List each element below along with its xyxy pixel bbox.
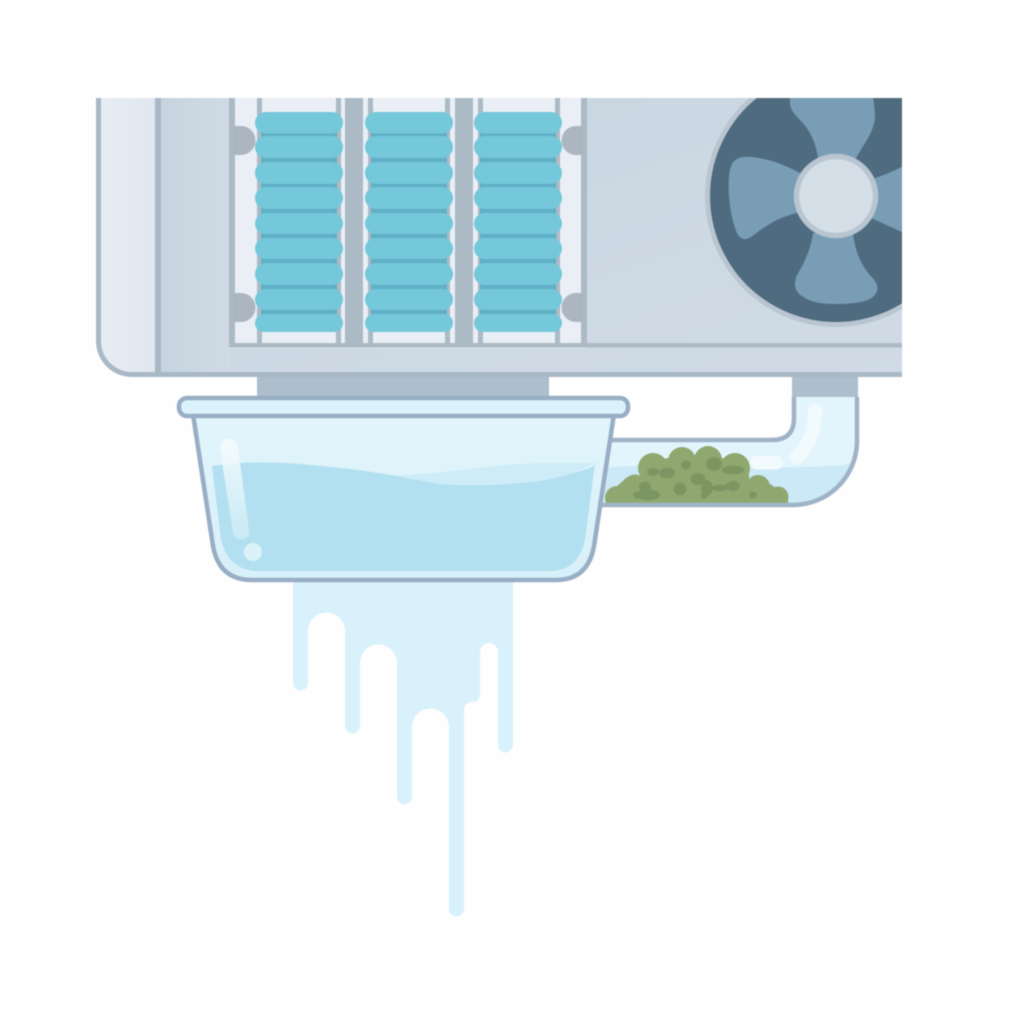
tray water <box>212 462 596 571</box>
coil column dividers <box>257 98 560 343</box>
housing outline <box>98 98 902 374</box>
drain stub under unit <box>257 376 549 399</box>
tray highlights <box>220 439 262 561</box>
pipe connector under unit <box>792 376 858 398</box>
coil fins left <box>255 112 343 332</box>
illustration: air conditioner overflow <box>96 97 903 917</box>
left light panel <box>100 98 155 372</box>
coil fins middle <box>365 112 453 332</box>
housing main panel <box>230 98 902 372</box>
tray glass body <box>193 414 614 580</box>
algae clog <box>605 446 788 510</box>
coil window <box>229 98 902 348</box>
panel divider <box>155 98 161 377</box>
mounting clips <box>233 126 583 322</box>
pipe water <box>604 464 851 503</box>
drain tray <box>179 398 628 580</box>
water dripping from the tray <box>293 578 513 917</box>
pipe highlights <box>750 411 815 470</box>
drain pipe with clog <box>600 397 857 510</box>
pipe interior <box>600 397 857 505</box>
side panel <box>160 98 230 377</box>
fan hub <box>796 156 876 236</box>
fan <box>705 97 903 327</box>
tray rim <box>179 398 628 416</box>
water surface back wave <box>397 463 595 485</box>
fan blades <box>729 96 904 304</box>
outdoor unit housing <box>96 97 903 378</box>
coil fins right <box>474 112 562 332</box>
fan ring <box>705 98 902 327</box>
pipe outline <box>602 397 857 505</box>
